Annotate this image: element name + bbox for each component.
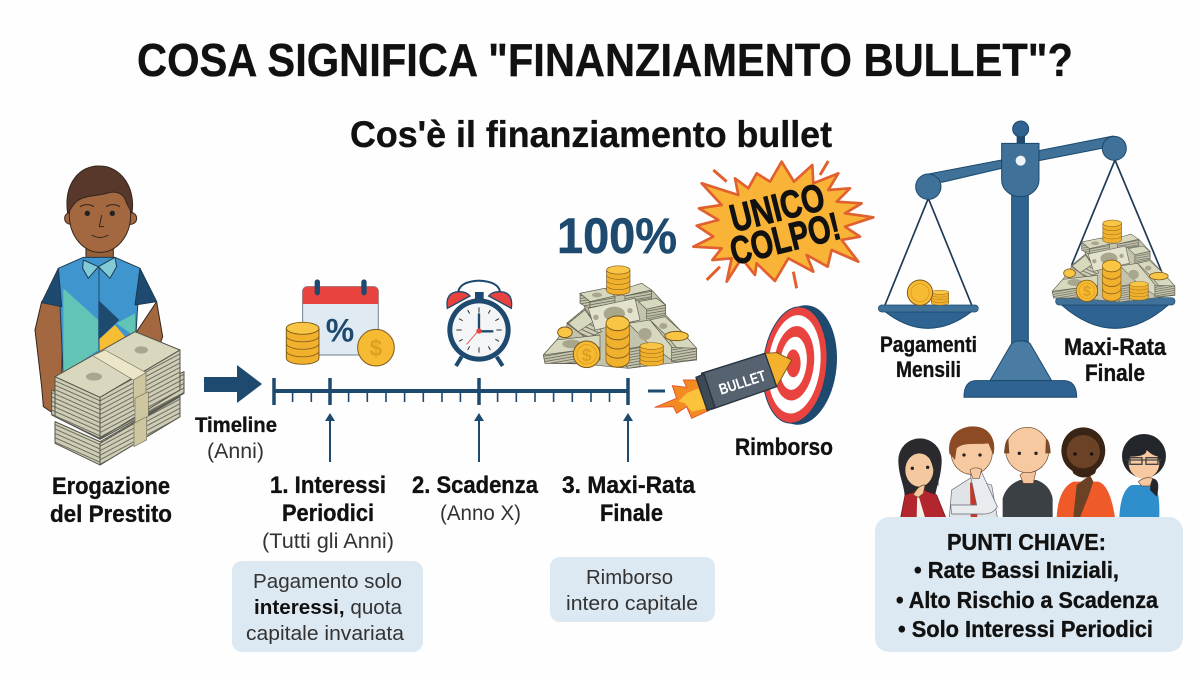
person 2: [949, 426, 997, 517]
callout text: UNICO: [726, 176, 829, 241]
label: erogazione del prestito: del Prestito: [50, 501, 172, 528]
label: maxi-rata finale: Maxi-Rata: [1064, 334, 1167, 361]
note box: full repayment: [550, 557, 715, 622]
label: erogazione del prestito: [50, 473, 172, 528]
step 3 label: [562, 472, 696, 527]
coins and cash on right pan: [1052, 220, 1175, 302]
icon: calendar with coins: %: [326, 313, 354, 349]
label: timeline: Timeline: [195, 414, 277, 437]
note box: interest payment: Pagamento solo: [253, 571, 402, 593]
callout text: COLPO!: [726, 205, 845, 274]
title: COSA SIGNIFICA "FINANZIAMENTO BULLET"?: [137, 34, 1073, 86]
panel: punti chiave: • Rate Bassi Iniziali,: [914, 557, 1119, 583]
person 1: [898, 438, 946, 517]
timeline axis: [274, 378, 628, 405]
step 2 label: (Anno X): [440, 502, 521, 525]
arrow: maturity: [474, 413, 484, 462]
label: pagamenti mensili: Pagamenti: [880, 332, 977, 357]
icon: alarm clock: [447, 281, 512, 366]
arrow: to timeline: [204, 365, 262, 403]
panel: loan disbursement: [35, 166, 184, 528]
arrow: final payment: [623, 413, 633, 462]
label: pagamenti mensili: Mensili: [896, 357, 961, 382]
callout text: [726, 176, 845, 274]
step 1 label: [262, 472, 394, 553]
label: maxi-rata finale: [1064, 334, 1167, 387]
step 1 label: (Tutti gli Anni): [262, 530, 394, 553]
label: timeline: (Anni): [207, 440, 264, 463]
panel: punti chiave: PUNTI CHIAVE:: [947, 529, 1106, 555]
label: erogazione del prestito: Erogazione: [52, 473, 170, 500]
step 3 label: Finale: [600, 500, 663, 527]
callout: unico colpo: [693, 161, 873, 288]
100 percent: 100%: [557, 208, 677, 264]
icon: calendar with coins: [286, 279, 394, 366]
note box: full repayment: Rimborso: [586, 567, 673, 589]
panel: punti chiave: [875, 517, 1183, 652]
icon: man with cash stack: [35, 166, 184, 465]
note box: full repayment: intero capitale: [566, 593, 698, 615]
label: rimborso: Rimborso: [735, 434, 833, 461]
step 1 label: 1. Interessi: [270, 472, 386, 499]
icon: balance scale: [878, 121, 1175, 397]
panel: punti chiave: • Solo Interessi Periodici: [898, 616, 1153, 642]
dashed lead to bullet: [648, 390, 665, 392]
starburst: [693, 161, 873, 288]
step 2 label: [412, 472, 539, 525]
person 3: [1003, 427, 1053, 517]
note box: interest payment: capitale invariata: [246, 623, 405, 645]
step 3 label: 3. Maxi-Rata: [562, 472, 696, 499]
icon: bullet hitting target: [655, 302, 843, 428]
label: maxi-rata finale: Finale: [1085, 360, 1145, 387]
label: timeline: [195, 414, 277, 463]
label: pagamenti mensili: [880, 332, 977, 382]
icon: bullet hitting target: BULLET: [717, 367, 769, 399]
panel: punti chiave: • Alto Rischio a Scadenza: [896, 587, 1158, 613]
icon: five thinking people: [898, 426, 1166, 517]
person 4: [1057, 427, 1115, 517]
arrow: interest: [325, 413, 335, 462]
note box: interest payment: interessi, quota: [254, 597, 403, 619]
subtitle: Cos'è il finanziamento bullet: [350, 114, 832, 155]
step 1 label: Periodici: [282, 500, 374, 527]
icon: calendar with coins: $: [370, 335, 383, 361]
icon: money pile: [543, 266, 697, 368]
person 5: [1119, 434, 1166, 517]
note box: interest payment: [232, 561, 423, 652]
step 2 label: 2. Scadenza: [412, 472, 539, 499]
